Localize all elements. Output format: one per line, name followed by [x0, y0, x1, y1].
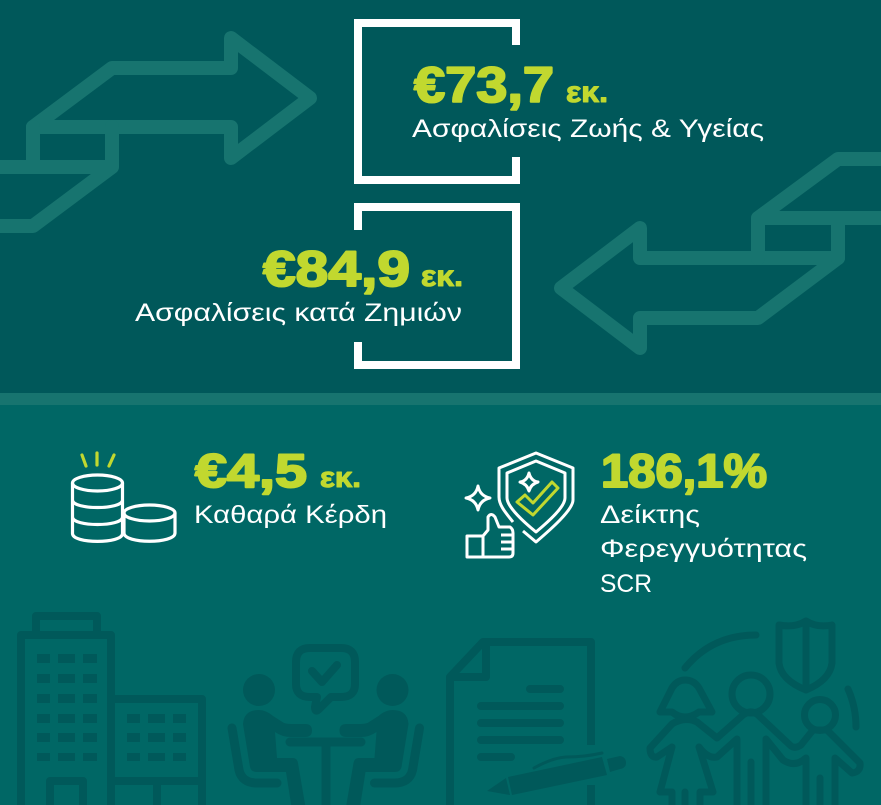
label line 3: SCR [600, 570, 652, 598]
right person [340, 674, 420, 805]
single coin [124, 505, 175, 541]
protection arcs [685, 635, 856, 727]
panel: non-life premiums [135, 207, 516, 365]
label: Ασφαλίσεις Ζωής & Υγείας [412, 115, 764, 143]
label line 1: Δείκτης [600, 501, 700, 529]
unit: εκ. [421, 260, 463, 293]
lime check [517, 482, 558, 515]
left sparkle [466, 486, 490, 510]
left person [232, 674, 312, 805]
coin sparkle ticks [82, 453, 114, 466]
unit: εκ. [320, 462, 361, 494]
value: 186,1% [601, 444, 767, 497]
label line 2: Φερεγγυότητας [600, 535, 807, 563]
bodies [697, 712, 860, 805]
top panel background [0, 0, 881, 393]
coin stack [72, 475, 122, 541]
bottom panel background [0, 405, 881, 805]
table [290, 742, 361, 805]
shield sparkle [520, 473, 538, 491]
icon: two people meeting [232, 648, 420, 805]
bracket frame [358, 207, 516, 365]
icon: right arrow [0, 38, 310, 226]
icon: office buildings [21, 616, 202, 805]
panel: net profit [72, 444, 387, 541]
panel: life and health premiums [358, 23, 764, 180]
unit: εκ. [566, 76, 608, 109]
value: €84,9 [263, 241, 410, 297]
icon: shield with thumbs up [466, 453, 573, 557]
label: Ασφαλίσεις κατά Ζημιών [135, 299, 462, 327]
thumbs up [467, 514, 513, 557]
icon: coins [72, 453, 175, 541]
shield [779, 621, 832, 690]
value: €73,7 [414, 57, 554, 113]
label: Καθαρά Κέρδη [194, 501, 387, 529]
bracket frame [358, 23, 516, 180]
icon: signed document [450, 642, 626, 805]
pen [487, 756, 626, 795]
band divider [0, 393, 881, 405]
icon: left arrow [561, 159, 881, 348]
shield outline [499, 453, 573, 542]
panel: solvency ratio [466, 444, 807, 598]
icon: family with shield [650, 621, 860, 805]
heads [732, 675, 770, 713]
speech bubble [296, 648, 355, 711]
windows [37, 654, 186, 761]
inner shield [507, 461, 565, 532]
value: €4,5 [195, 444, 307, 497]
